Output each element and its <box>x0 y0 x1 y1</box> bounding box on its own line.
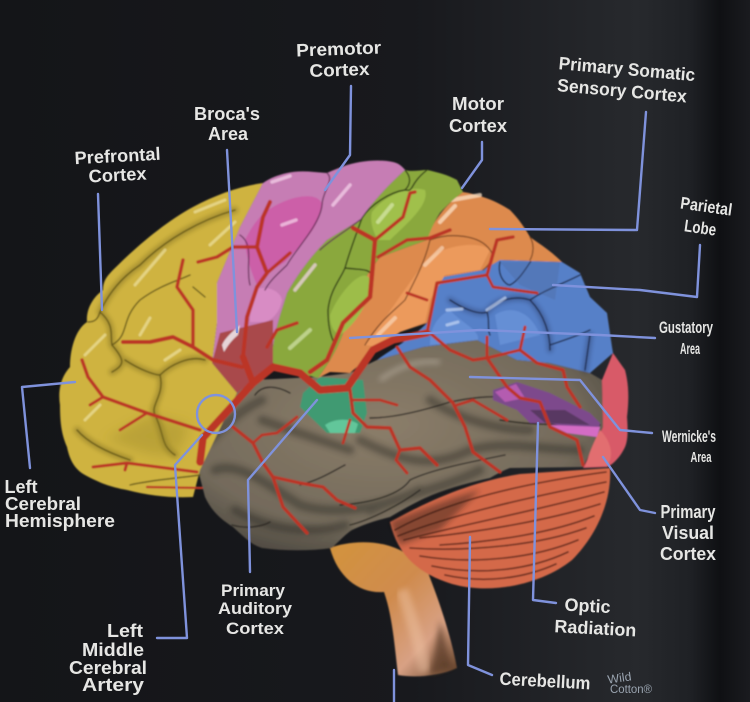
label: Wernicke's Area: Area <box>690 449 712 466</box>
Broca's area: dark red patch <box>212 320 273 393</box>
label: Premotor Cortex: Premotor <box>296 38 382 60</box>
label: Optic Radiation: Radiation <box>554 616 637 640</box>
cerebellum <box>390 468 610 588</box>
artery branches, temporal <box>233 347 507 533</box>
temporal lobe: grey-brown <box>198 340 603 550</box>
label: Left Cerebral Hemisphere: Cerebral <box>5 494 81 514</box>
label: Motor Cortex <box>449 94 507 136</box>
motor cortex: green <box>273 170 463 378</box>
line: primary auditory cortex <box>248 400 317 572</box>
label: Optic Radiation: Optic <box>564 595 611 617</box>
label: Premotor Cortex <box>296 38 382 81</box>
label: Left Middle Cerebral Artery: Cerebral <box>69 658 147 678</box>
label: Parietal Lobe: Parietal <box>679 194 733 220</box>
label: Motor Cortex: Motor <box>452 94 504 114</box>
line: cerebellum <box>468 537 492 675</box>
label: Gustatory Area <box>659 318 713 358</box>
label: Primary Visual Cortex: Visual <box>662 523 714 543</box>
premotor cortex: pink <box>212 160 405 393</box>
line: optic radiation <box>533 423 556 603</box>
label: Wernicke's Area: Wernicke's <box>662 427 716 446</box>
label: Broca's Area: Area <box>208 124 249 144</box>
label: Prefrontal Cortex: Cortex <box>88 164 147 187</box>
line: gustatory area <box>350 330 655 338</box>
logo: Wild Cotton <box>607 669 652 696</box>
visual cortex: red-pink <box>583 353 628 468</box>
label: Prefrontal Cortex <box>74 144 162 187</box>
label: Primary Somatic Sensory Cortex: Sensory Cortex <box>556 75 688 106</box>
logo: Wild Cotton: Wild <box>607 669 632 687</box>
parietal lobe: blue <box>377 258 613 373</box>
teal patch: primary auditory cortex <box>300 377 367 433</box>
line: parietal lobe <box>553 245 700 297</box>
label: Parietal Lobe: Lobe <box>683 216 717 240</box>
artery trunk <box>200 333 427 462</box>
label: Primary Auditory Cortex: Primary <box>221 581 286 600</box>
label: Motor Cortex: Cortex <box>449 116 507 136</box>
label: Optic Radiation <box>554 594 638 640</box>
somatosensory cortex: orange <box>318 192 562 378</box>
label: Primary Auditory Cortex: Auditory <box>218 599 293 618</box>
label: Primary Somatic Sensory Cortex: Primary Somatic <box>558 53 696 85</box>
brain illustration <box>59 160 628 676</box>
label: Left Middle Cerebral Artery: Left <box>107 621 143 641</box>
label: Parietal Lobe <box>676 194 733 241</box>
label: Left Cerebral Hemisphere <box>4 477 115 531</box>
logo: Wild Cotton: Cotton® <box>610 682 652 696</box>
label: Left Cerebral Hemisphere: Left <box>4 477 38 497</box>
line: left cerebral hemisphere <box>22 382 75 468</box>
label: Primary Visual Cortex: Primary <box>660 502 716 522</box>
brain stem <box>330 542 457 676</box>
label: Wernicke's Area <box>662 427 716 466</box>
label: Primary Auditory Cortex <box>218 581 293 638</box>
line: motor cortex <box>462 142 482 188</box>
label: Broca's Area: Broca's <box>194 104 260 124</box>
prefrontal cortex: yellow <box>59 183 263 497</box>
line and ring: left middle cerebral artery <box>157 395 235 638</box>
line: bottom stub <box>393 670 395 702</box>
leader lines <box>22 86 700 702</box>
line: Wernicke's area <box>470 377 652 433</box>
label: Primary Somatic Sensory Cortex <box>556 53 696 107</box>
artery branches, parietal and occipital <box>310 192 583 465</box>
label: Premotor Cortex: Cortex <box>309 59 370 81</box>
line: Broca's area <box>227 150 237 332</box>
middle cerebral artery network <box>82 192 583 533</box>
line: primary somatic sensory cortex <box>490 112 646 230</box>
label: Primary Visual Cortex: Cortex <box>660 544 716 564</box>
label: Primary Auditory Cortex: Cortex <box>226 619 285 638</box>
label: Left Middle Cerebral Artery <box>69 621 147 695</box>
label: Primary Visual Cortex <box>660 502 716 564</box>
purple patch: optic radiation <box>493 382 600 437</box>
label: Left Cerebral Hemisphere: Hemisphere <box>5 511 115 531</box>
label: Cerebellum: Cerebellum <box>499 669 591 693</box>
line: prefrontal cortex <box>98 194 102 310</box>
label: Left Middle Cerebral Artery: Middle <box>82 640 144 660</box>
line: premotor cortex <box>325 86 351 190</box>
label: Gustatory Area: Area <box>680 341 700 358</box>
label: Left Middle Cerebral Artery: Artery <box>82 675 144 695</box>
artery branches, frontal <box>82 202 297 488</box>
label: Prefrontal Cortex: Prefrontal <box>74 144 161 168</box>
line: primary visual cortex <box>603 457 655 513</box>
label: Gustatory Area: Gustatory <box>659 318 713 337</box>
label: Broca's Area <box>194 104 260 144</box>
